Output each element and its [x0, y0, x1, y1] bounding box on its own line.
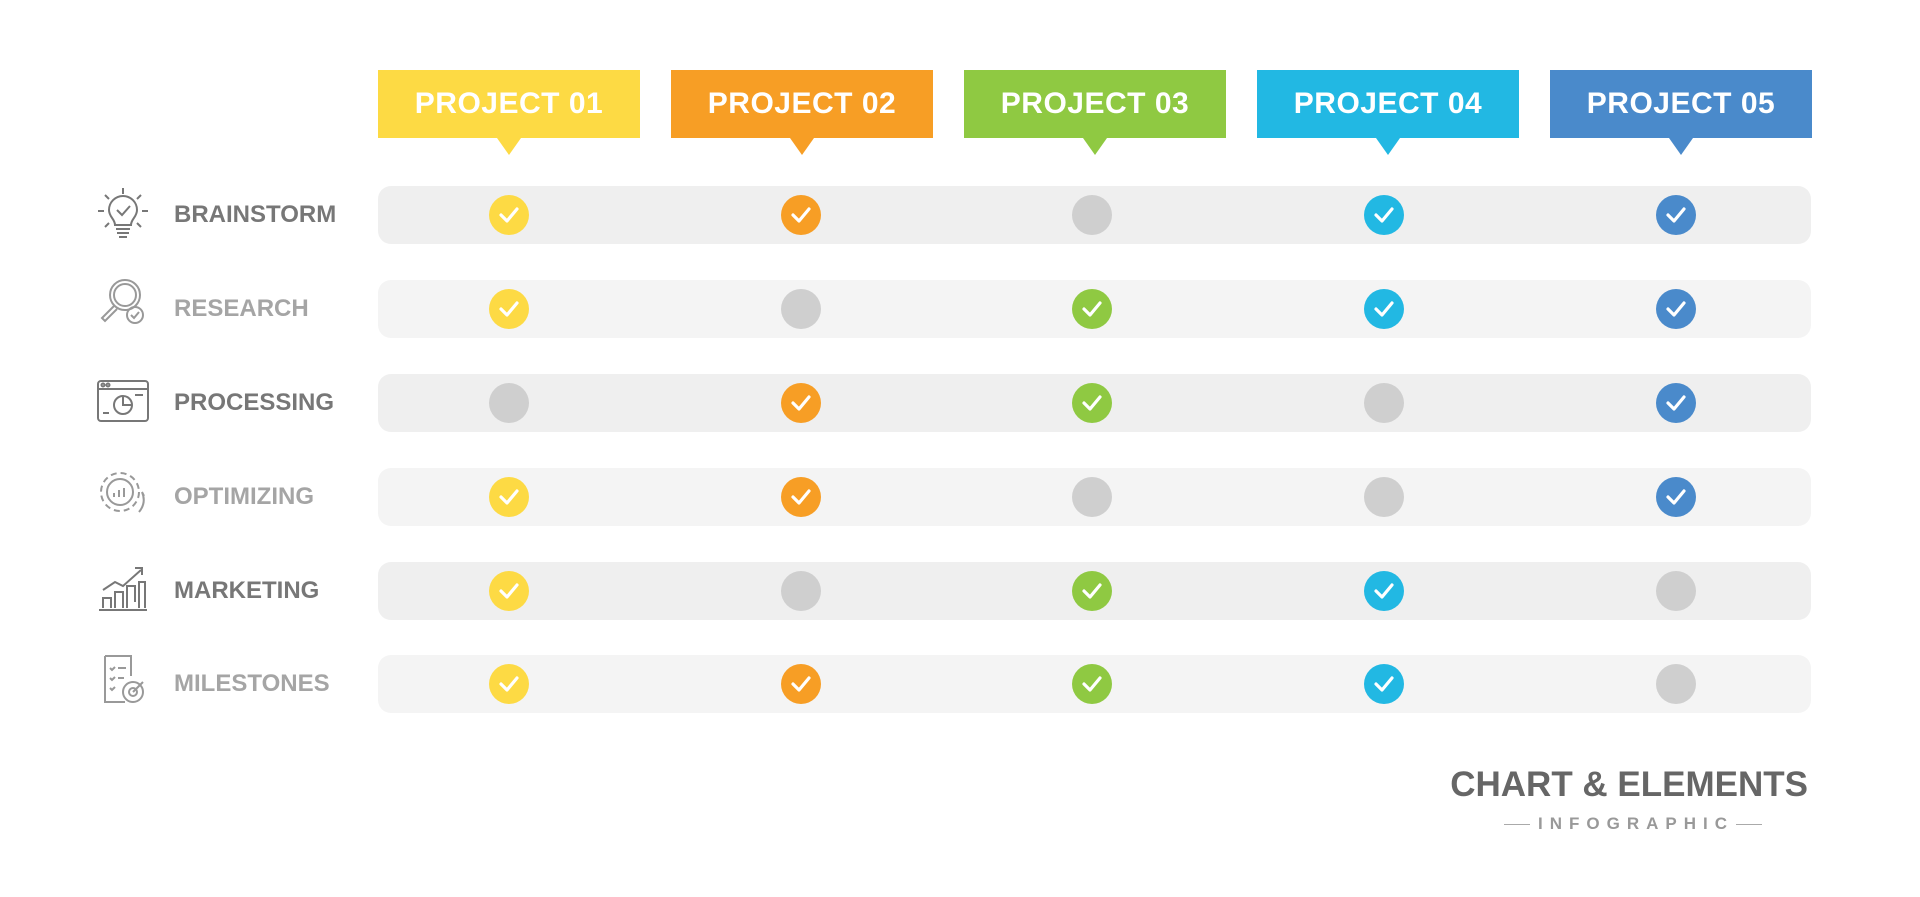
footer title	[1450, 765, 1808, 833]
icon: browser chart	[97, 380, 149, 422]
icon: gear	[100, 472, 145, 512]
header: project 05: PROJECT 05	[1587, 87, 1775, 120]
header: project 04	[1257, 70, 1519, 138]
header: project 05	[1550, 70, 1812, 138]
footer title: INFOGRAPHIC	[1538, 814, 1734, 833]
row: brainstorm	[378, 186, 1811, 244]
row: research	[378, 280, 1811, 338]
header: project 03	[964, 70, 1226, 138]
header: project 03: PROJECT 03	[1001, 87, 1189, 120]
icon: checklist target	[104, 655, 144, 703]
label: brainstorm: BRAINSTORM	[174, 201, 336, 228]
label: optimizing: OPTIMIZING	[174, 483, 314, 510]
label: marketing: MARKETING	[174, 577, 319, 604]
icon: lightbulb	[98, 188, 148, 238]
header: project 02: PROJECT 02	[708, 87, 896, 120]
header: project 04: PROJECT 04	[1294, 87, 1482, 120]
header: project 01: PROJECT 01	[415, 87, 603, 120]
footer title: CHART & ELEMENTS	[1450, 765, 1808, 804]
header: project 02	[671, 70, 933, 138]
label: research: RESEARCH	[174, 295, 309, 322]
row: processing	[378, 374, 1811, 432]
icon: magnifier	[100, 279, 144, 324]
row: marketing	[378, 562, 1811, 620]
icon: growth chart	[99, 567, 147, 611]
row: optimizing	[378, 468, 1811, 526]
label: processing: PROCESSING	[174, 389, 334, 416]
row: milestones	[378, 655, 1811, 713]
label: milestones: MILESTONES	[174, 670, 330, 697]
header: project 01	[378, 70, 640, 138]
